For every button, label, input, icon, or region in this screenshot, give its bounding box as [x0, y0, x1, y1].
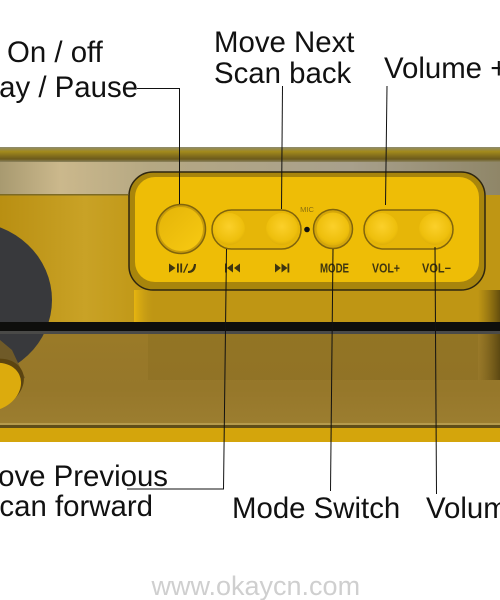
label: on off play pause	[0, 36, 138, 104]
button: mode	[314, 210, 352, 248]
microphone hole and label	[300, 205, 314, 232]
panel icon: previous	[225, 264, 240, 272]
label: on off play pause: On / off	[7, 36, 104, 69]
label: move next scan back	[214, 26, 354, 90]
button: volume pill	[364, 210, 453, 249]
button: play / pause	[156, 204, 206, 254]
panel labels: MODE	[320, 262, 349, 276]
black divider bar	[0, 322, 500, 334]
panel icon: play pause call	[169, 264, 196, 273]
label: move previous scan forward	[0, 460, 168, 523]
panel labels	[320, 262, 451, 276]
speaker cone	[0, 222, 52, 378]
panel labels: VOL+	[372, 262, 400, 276]
button: previous / next pill	[212, 210, 301, 249]
label: mode switch: Mode Switch	[232, 492, 400, 525]
panel icon: next	[275, 264, 289, 272]
panel labels: VOL−	[422, 262, 451, 276]
leader lines	[127, 86, 436, 494]
microphone hole and label: MIC	[300, 205, 314, 214]
control panel	[129, 172, 485, 290]
speaker body	[0, 147, 500, 442]
label: move next scan back: Scan back	[214, 57, 352, 90]
label: move next scan back: Move Next	[214, 26, 354, 59]
yellow knob	[0, 340, 32, 420]
